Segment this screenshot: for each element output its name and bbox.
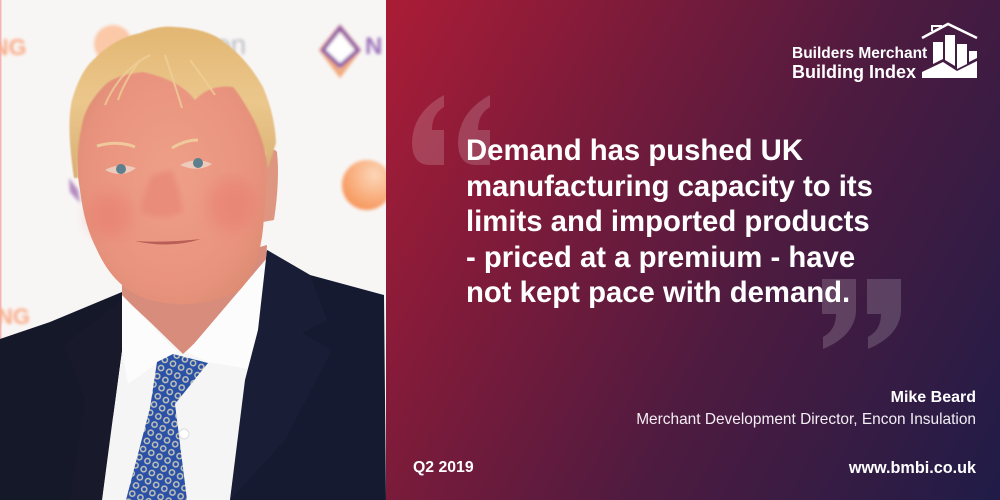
quote text	[466, 134, 873, 309]
neck	[122, 245, 267, 354]
quote text: limits and imported products	[466, 205, 870, 238]
hair fringe strands	[105, 55, 215, 108]
jacket	[0, 292, 135, 500]
website: www.bmbi.co.uk	[849, 459, 976, 477]
icon: opening quotation mark	[412, 95, 490, 165]
mouth	[135, 239, 201, 245]
quote text: manufacturing capacity to its	[466, 170, 873, 202]
lapel	[230, 250, 332, 500]
backdrop logos: on	[215, 29, 246, 60]
icon: closing quotation mark	[822, 279, 901, 349]
quote text: Demand has pushed UK	[466, 134, 803, 167]
panel: quote gradient background	[386, 0, 1000, 500]
hair	[69, 27, 276, 178]
nose	[141, 170, 183, 217]
cheek blush	[88, 179, 256, 237]
shirt	[102, 260, 267, 500]
photo backdrop	[0, 0, 386, 500]
quote text: - priced at a premium - have	[466, 240, 855, 274]
backdrop logos	[0, 25, 392, 329]
attribution role: Merchant Development Director, Encon Insulation	[636, 411, 976, 428]
logo wordmark: Building Index	[792, 62, 916, 82]
collar	[122, 258, 267, 384]
icon: house with bars	[921, 22, 978, 78]
ear	[262, 150, 278, 222]
face	[77, 50, 266, 304]
panel: portrait photo	[0, 0, 386, 500]
eyes	[97, 140, 212, 174]
logo wordmark	[792, 45, 927, 82]
logo: Builders Merchant Building Index	[792, 22, 978, 82]
tie	[126, 354, 208, 500]
backdrop logos: N	[365, 33, 382, 60]
date label: Q2 2019	[413, 459, 474, 476]
logo wordmark: Builders Merchant	[792, 45, 927, 62]
attribution name: Mike Beard	[891, 389, 976, 406]
shirt button	[179, 429, 189, 439]
quote text: not kept pace with demand.	[466, 276, 850, 309]
